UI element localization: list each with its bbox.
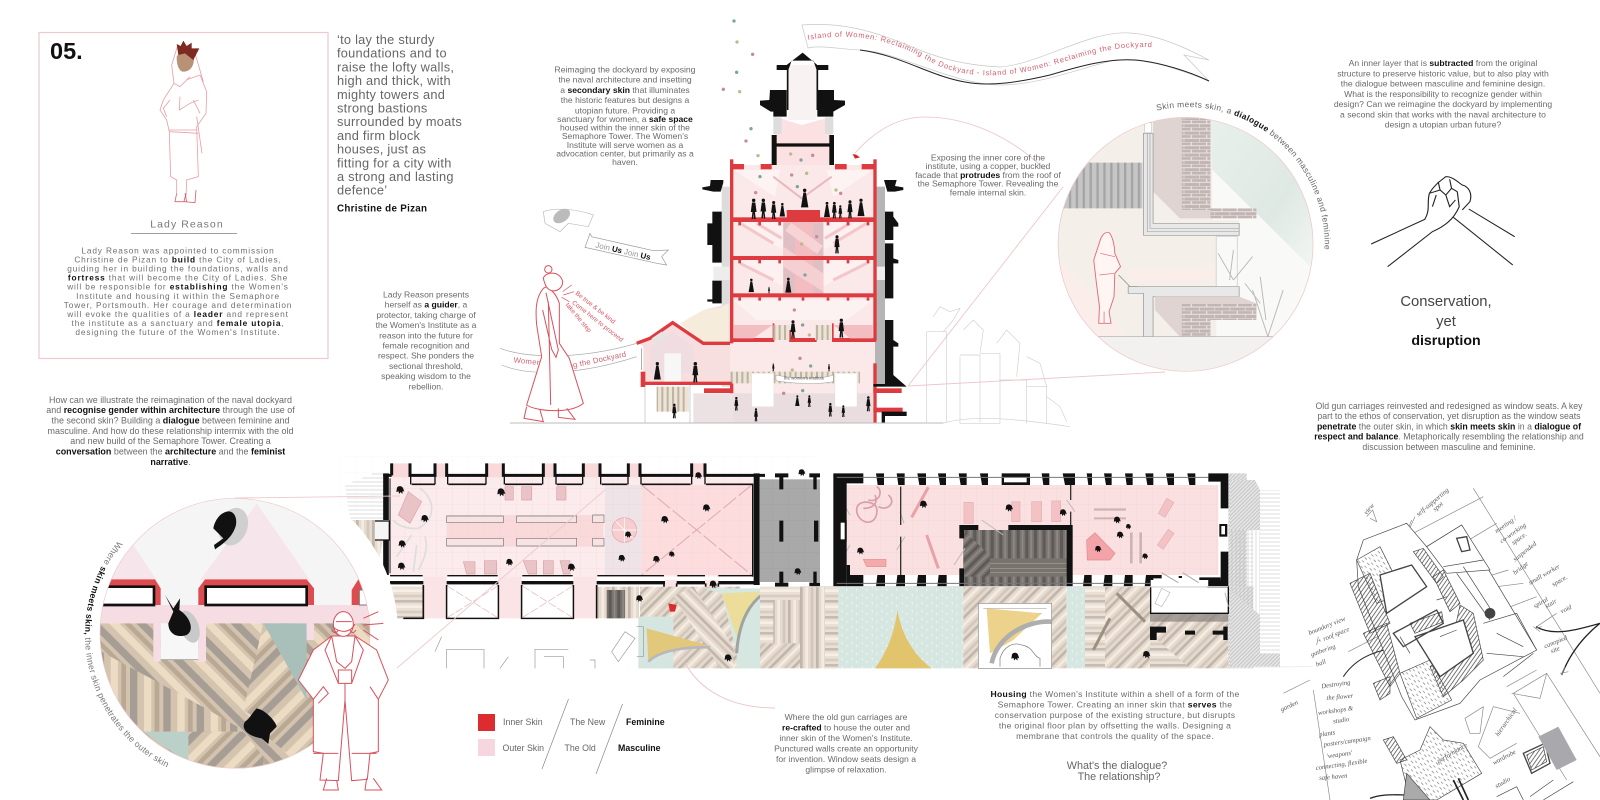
text block: An inner layer: What is the responsibility to recognize gender within xyxy=(1344,89,1542,99)
text block: Lady Reason presents: herself as a guider, a xyxy=(385,300,468,310)
text block: Lady Reason description: guiding her in building the foundations, walls and xyxy=(67,264,289,274)
text block: Reimaging the dockyard xyxy=(555,64,696,167)
quote: Christine de Pizan: high and thick, with xyxy=(337,73,451,88)
lantern xyxy=(760,53,845,197)
furniture xyxy=(843,485,1174,575)
curved caption: skin meets skin: Skin meets skin, a dialogue between masculine and feminine xyxy=(1156,102,1331,250)
tower body xyxy=(713,165,890,423)
text block: Lady Reason presents: respect. She ponders the xyxy=(378,351,474,361)
text block: How can we illustrate: the second skin? Building a dialogue between feminine and xyxy=(52,416,290,426)
climbers sketch to right of tower xyxy=(927,307,1070,427)
text block: Exposing the inner core: Exposing the inner core of the xyxy=(931,152,1045,162)
chart: section through the Semaphore Tower xyxy=(500,19,943,423)
text block: How can we illustrate: narrative. xyxy=(150,457,191,467)
text block: Reimaging the dockyard: advocation center, but primarily as a xyxy=(556,149,694,159)
quote: Christine de Pizan: a strong and lasting xyxy=(337,169,454,184)
legend labels: Inner Skin xyxy=(503,717,543,727)
banner: Join Us xyxy=(543,206,668,265)
text block: Old gun carriages: penetrate the outer skin, in which skin meets skin in a dialogue of xyxy=(1317,422,1581,432)
white clearance around lower detail circle xyxy=(72,470,398,796)
quote: Christine de Pizan: Christine de Pizan xyxy=(337,204,427,214)
panel: Lady Reason profile card xyxy=(39,32,328,358)
handwritten notes: studio xyxy=(1494,776,1512,790)
handwritten notes: space. xyxy=(1510,531,1529,547)
text block: Reimaging the dockyard: Institute will serve women as a xyxy=(567,140,683,150)
legend labels: The New xyxy=(570,717,606,727)
handwritten notes: spiral xyxy=(1532,596,1550,610)
quote: Christine de Pizan: surrounded by moats xyxy=(337,114,462,129)
black walls xyxy=(375,463,765,618)
legend labels xyxy=(502,717,665,753)
text block: Housing the Women's Institute: Housing the Women's Institute within a shell of a form of the xyxy=(990,689,1240,699)
quote: Christine de Pizan: houses, just as xyxy=(337,142,426,157)
text block: Lady Reason description: fortress that will become the City of Ladies. She xyxy=(68,273,288,283)
text block: Exposing the inner core: the Semaphore Tower. Revealing the xyxy=(918,179,1059,189)
speech words: Be true & be kind xyxy=(574,290,617,326)
handwritten notes: garden xyxy=(1280,699,1300,713)
text block: Housing the Women's Institute: Semaphore Tower. Creating an inner skin that serves the xyxy=(998,700,1232,710)
text block: An inner layer: structure to preserve historic value, but to also play with xyxy=(1337,68,1549,78)
gray stair hall xyxy=(760,473,820,587)
handwritten notes: studio xyxy=(1333,716,1350,725)
occupants top view xyxy=(857,501,1150,661)
quote: Christine de Pizan: fitting for a city with xyxy=(337,155,452,170)
text block: Lady Reason presents: reason into the future for xyxy=(379,330,473,340)
text block: Reimaging the dockyard: utopian future. Providing a xyxy=(575,105,675,115)
text block: Reimaging the dockyard: the naval architecture and insetting xyxy=(558,75,692,85)
speech words: take the step xyxy=(564,302,593,334)
text block: How can we illustrate: conversation between the architecture and the feminist xyxy=(56,447,285,457)
text block: Where the old gun carriages: re-crafted to house the outer and xyxy=(782,722,910,732)
handwritten notes: small worker xyxy=(1527,563,1562,587)
handwritten notes: suspended xyxy=(1512,540,1539,563)
text block: An inner layer: the dialogue between masculine and feminine design. xyxy=(1341,78,1545,88)
text block: Exposing the inner core: female internal skin. xyxy=(950,187,1026,197)
gray reference square xyxy=(1538,727,1577,770)
text block: Lady Reason presents: sectional threshold, xyxy=(389,361,463,371)
handwritten notes: the flower xyxy=(1326,693,1354,702)
ghost drawings, lower left xyxy=(435,627,643,668)
text block: An inner layer: design? Can we reimagine the dockyard by implementing xyxy=(1334,99,1552,109)
text block: Lady Reason description: Institute and housing it within the Semaphore xyxy=(76,291,280,301)
handwritten notes: posters/campaign xyxy=(1322,735,1372,749)
window X marks xyxy=(447,586,639,618)
handwritten notes: workshops & xyxy=(1318,705,1354,717)
text block: Lady Reason description: Christine de Pizan to build the City of Ladies, xyxy=(74,254,282,264)
walls and piers xyxy=(833,473,1228,640)
annex with roof xyxy=(637,303,733,423)
banner text: Reclaiming the Dockyard: ing the Dockyard xyxy=(566,350,627,371)
handwritten notes: connecting, flexible xyxy=(1315,758,1368,772)
text block: Lady Reason description: the institute as a sanctuary and female utopia, xyxy=(72,318,284,328)
question text: What's the dialogue? xyxy=(1067,760,1167,772)
text block: Exposing the inner core xyxy=(915,152,1061,197)
text block: Lady Reason description xyxy=(64,246,292,337)
handwritten notes: stair xyxy=(1544,598,1559,610)
ground line xyxy=(510,421,943,424)
handwritten notes: 'weapons' xyxy=(1326,750,1353,760)
text block: Lady Reason description: will evoke the qualities of a leader and represent xyxy=(66,309,289,319)
legend labels: Masculine xyxy=(618,743,661,753)
handwritten notes: bridge xyxy=(1512,560,1530,577)
sketch building plan xyxy=(1350,523,1573,800)
quote: Christine de Pizan: and firm block xyxy=(337,128,421,143)
banner: Join Us: Join Us Join Us xyxy=(595,241,652,262)
handwritten notes: spot xyxy=(1432,501,1445,513)
quote: Christine de Pizan: raise the lofty walls, xyxy=(337,59,454,74)
text block: Where the old gun carriages: for invention. Window seats design a xyxy=(776,754,916,764)
handwritten notes: + roof space xyxy=(1316,626,1350,645)
text block: How can we illustrate: and recognise gender within architecture through the use of xyxy=(46,405,295,415)
handwritten notes: plants xyxy=(1318,729,1336,739)
quote: Christine de Pizan xyxy=(337,32,462,214)
handwritten notes: gathering xyxy=(1310,643,1337,659)
connector line: plan to lower detail circle xyxy=(397,490,605,668)
hatch panel, far right of plan xyxy=(1230,480,1313,667)
text block: Lady Reason description: will be responsible for establishing the Women's xyxy=(66,282,289,292)
detail circle: skin meets skin xyxy=(1054,113,1321,377)
text block: Old gun carriages: discussion between masculine and feminine. xyxy=(1362,442,1536,452)
number heading: 05. xyxy=(50,38,83,64)
text block: Exposing the inner core: facade that protrudes from the roof of xyxy=(915,170,1061,180)
handwritten notes: view xyxy=(1363,502,1376,516)
handwritten notes: space. xyxy=(1551,574,1569,588)
legend labels: Outer Skin xyxy=(502,743,544,753)
lower surfaces xyxy=(800,587,1253,668)
icon: clasped hands xyxy=(1371,177,1515,267)
handwritten notes: meeting / xyxy=(1494,514,1519,535)
banner text: Island of Women: Women xyxy=(513,355,542,367)
connector: section to detail circle xyxy=(908,187,1165,386)
text block: An inner layer xyxy=(1334,58,1552,130)
handwritten notes: hall xyxy=(1315,658,1327,669)
text block: Housing the Women's Institute: conservation purpose of the existing structure, but disrupts xyxy=(995,710,1235,720)
handwritten notes: canopied xyxy=(1543,634,1569,650)
hand sketch: annotated plan xyxy=(1280,486,1600,800)
curved caption: where skin meets skin: Where skin meets skin, the inner skin penetrates the outer skin xyxy=(84,542,168,768)
question text xyxy=(1067,760,1167,783)
text block: Lady Reason description: Lady Reason was appointed to commission xyxy=(81,246,275,256)
text block: Old gun carriages: respect and balance. Metaphorically resembling the relationship and xyxy=(1314,432,1584,442)
arc: link from roof to detail circle xyxy=(855,117,1045,170)
text block: Where the old gun carriages xyxy=(774,712,919,775)
handwritten notes: Destroying xyxy=(1320,679,1352,690)
dark core xyxy=(959,525,1073,587)
handwritten notes: safe haven xyxy=(1319,772,1348,782)
text block: Housing the Women's Institute xyxy=(990,689,1240,741)
text block: Exposing the inner core: institute, using a copper, buckled xyxy=(926,161,1051,171)
red inner skin structure xyxy=(703,159,903,423)
text block: An inner layer: design a utopian urban future? xyxy=(1385,120,1502,130)
heading: Conservation, yet disruption: Conservation, xyxy=(1400,294,1492,310)
legend labels: Feminine xyxy=(626,717,665,727)
text block: Lady Reason description: designing the future of the Women's Institute. xyxy=(75,327,281,337)
mid and lower floor details: the women's institute xyxy=(784,375,825,380)
figure name: Lady Reason xyxy=(150,218,224,230)
furniture and dashed roof lines xyxy=(393,485,752,575)
text block: Reimaging the dockyard: sanctuary for women, a safe space xyxy=(557,114,693,124)
legend labels: The Old xyxy=(564,743,596,753)
lines and room xyxy=(837,477,1228,613)
swatch: inner skin xyxy=(478,714,495,731)
handwritten notes: hierarchical xyxy=(1494,707,1519,738)
text block: An inner layer: a second skin that works with the naval architecture to xyxy=(1340,109,1546,119)
text block: Where the old gun carriages: Where the old gun carriages are xyxy=(785,712,908,722)
mid and lower floor details xyxy=(704,325,873,423)
handwritten notes: co-working xyxy=(1499,521,1528,545)
text block: Where the old gun carriages: Punctured walls create an opportunity xyxy=(774,744,919,754)
text block: Old gun carriages xyxy=(1314,401,1584,452)
text block: Where the old gun carriages: inner skin of the Women's Institute. xyxy=(779,733,913,743)
tangent line: lower circle top to plan xyxy=(235,496,400,498)
text block: How can we illustrate: and new build of the Semaphore Tower. Creating a xyxy=(70,436,271,446)
text block: Lady Reason presents: speaking wisdom to the xyxy=(381,371,471,381)
text block: Where the old gun carriages: glimpse of relaxation. xyxy=(805,765,887,775)
arc: window seat callout link xyxy=(685,663,775,708)
text block: Housing the Women's Institute: the original floor plan by offsetting the walls. Designing a xyxy=(999,720,1231,730)
confetti balloons xyxy=(722,19,842,395)
text block: Lady Reason presents: female recognition and xyxy=(383,340,470,350)
banner: Island of Women top xyxy=(802,24,1210,86)
hall floor xyxy=(837,473,1253,587)
occupants xyxy=(654,189,870,421)
handwritten notes xyxy=(1280,486,1574,790)
handwritten notes: wardrobe xyxy=(1492,749,1517,767)
chart: floor plan, east hall xyxy=(800,473,1253,668)
quote: Christine de Pizan: strong bastions xyxy=(337,100,428,116)
detail circle: where skin meets skin xyxy=(97,497,388,790)
text block: Lady Reason presents: Lady Reason presents xyxy=(383,290,469,300)
figure: Lady Reason speaking xyxy=(524,266,583,422)
text block: Reimaging the dockyard: housed within the inner skin of the xyxy=(560,123,690,133)
lower courtyard surfaces xyxy=(638,587,820,668)
text block: Lady Reason description: Tower, Portsmouth. Her courage and determination xyxy=(64,300,292,310)
question text: The relationship? xyxy=(1078,771,1160,783)
handwritten notes: performance xyxy=(1435,742,1469,766)
heading: Conservation, yet disruption: yet xyxy=(1436,314,1456,330)
left hatching xyxy=(345,473,423,618)
text block: How can we illustrate: masculine. And how do these relationship intermix with the old xyxy=(48,426,293,436)
handwritten notes: site xyxy=(1550,645,1561,655)
text block: Lady Reason presents xyxy=(376,290,477,391)
text block: Lady Reason presents: protector, taking charge of xyxy=(376,310,476,320)
text block: An inner layer: An inner layer that is subtracted from the original xyxy=(1349,58,1537,68)
heading: Conservation, yet disruption: disruption xyxy=(1411,333,1481,349)
text block: How can we illustrate: How can we illustrate the reimagination of the naval dockyard xyxy=(49,395,292,405)
text block: Reimaging the dockyard: a secondary skin that illuminates xyxy=(560,85,690,95)
handwritten notes: boundary view xyxy=(1307,615,1347,637)
chart: floor plan, west hall xyxy=(340,453,820,668)
occupants top view xyxy=(396,469,805,662)
speech words: Come here to proceed xyxy=(570,299,625,344)
quote: Christine de Pizan: defence’ xyxy=(337,183,387,198)
sketch lines and building outline xyxy=(1283,488,1600,800)
quote: Christine de Pizan: mighty towers and xyxy=(337,87,445,102)
black outer skin xyxy=(699,180,907,423)
handwritten notes: self-supporting xyxy=(1415,486,1451,518)
text block: How can we illustrate xyxy=(46,395,295,467)
swatch: outer skin xyxy=(478,739,495,756)
banner: Island of Women top: Island of Women: Reclaiming the Dockyard - Island of Women: Reclaiming the Dockyard xyxy=(808,31,1152,76)
text block: Old gun carriages: Old gun carriages reinvested and redesigned as window seats. A key xyxy=(1315,401,1583,411)
icon: red shoe xyxy=(853,154,860,159)
handwritten notes: void xyxy=(1560,604,1574,615)
text block: Lady Reason presents: the Women's Institute as a xyxy=(376,320,477,330)
lower banner outline xyxy=(500,343,637,372)
quote: Christine de Pizan: ‘to lay the sturdy xyxy=(337,32,435,47)
text block: Housing the Women's Institute: membrane that controls the quality of the space. xyxy=(1016,731,1214,741)
figure: red outline standing figure xyxy=(298,612,388,790)
text block: Reimaging the dockyard: the historic features but designs a xyxy=(561,95,689,105)
text block: Reimaging the dockyard: Semaphore Tower. The Women's xyxy=(562,131,688,141)
interior floor xyxy=(390,463,753,618)
legend xyxy=(478,699,665,774)
quote: Christine de Pizan: foundations and to xyxy=(337,46,447,61)
text block: Reimaging the dockyard: haven. xyxy=(612,157,638,167)
text block: Reimaging the dockyard: Reimaging the dockyard by exposing xyxy=(555,64,696,74)
text block: Old gun carriages: part to the ethos of conservation, yet disruption as the window seats xyxy=(1317,411,1581,421)
figure: Lady Reason with crown xyxy=(160,41,207,203)
text block: Lady Reason presents: rebellion. xyxy=(409,381,443,391)
heading: Conservation, yet disruption xyxy=(1400,294,1492,349)
